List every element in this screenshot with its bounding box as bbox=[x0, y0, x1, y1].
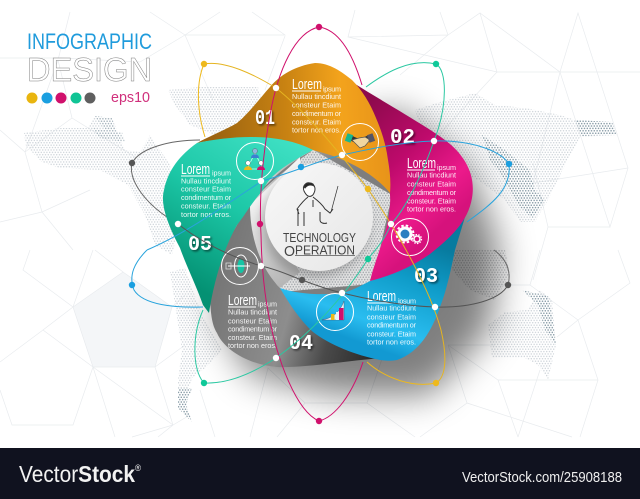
panel: orange petal 01 bbox=[197, 63, 390, 193]
label: eps10: eps10 bbox=[111, 89, 150, 106]
panel: green petal 05 bbox=[163, 137, 313, 313]
heading: Lorem bbox=[407, 156, 436, 172]
text block: 03 bbox=[367, 289, 417, 346]
text block: 01: ipsum bbox=[323, 84, 341, 94]
text block: 05: tortor non eros. bbox=[181, 210, 231, 219]
icon: gears bbox=[392, 218, 428, 256]
text block: 04: consteur Etaim bbox=[228, 316, 277, 326]
center title line 2: PERATION bbox=[295, 244, 355, 258]
center disc shadow bbox=[261, 170, 369, 278]
map: north america bbox=[24, 116, 178, 255]
footer logo: VectorStock bbox=[19, 461, 141, 487]
text block: 03: consteur Etaim bbox=[367, 312, 416, 322]
text block: 01: condimentum or bbox=[292, 109, 342, 118]
number 05: 05 bbox=[188, 234, 212, 257]
text block: 01: consteur. Etaim bbox=[292, 118, 341, 126]
text block: 04: ipsum bbox=[258, 300, 277, 308]
map: greenland bbox=[168, 87, 262, 135]
panel: grey petal 04 bbox=[210, 150, 385, 367]
map: south america bbox=[170, 268, 222, 422]
dotted world map bbox=[24, 87, 618, 422]
map: australia bbox=[488, 290, 556, 380]
back orbit segments bbox=[131, 27, 509, 421]
text block: 03: tortor non eros. bbox=[367, 338, 416, 346]
text block: 05 bbox=[181, 162, 232, 219]
text block: 01: consteur Etaim bbox=[292, 100, 341, 110]
text block: 01 bbox=[292, 77, 342, 134]
text block: 03: ipsum bbox=[398, 296, 416, 306]
orbit: green bbox=[204, 64, 444, 383]
orbit: blue back bbox=[132, 164, 509, 307]
footer bar bbox=[0, 448, 640, 499]
text block: 02: ipsum bbox=[437, 163, 456, 172]
icon: presenter with pointer bbox=[297, 183, 338, 226]
text block: 04: Nullau tincdiunt bbox=[228, 308, 277, 316]
front orbit lines bbox=[147, 27, 509, 421]
text block: 05: consteur. Etaim bbox=[181, 202, 231, 210]
text block: 05: consteur Etaim bbox=[181, 184, 231, 194]
text block: 03: Nullau tincdiunt bbox=[367, 304, 416, 312]
colour dots bbox=[26, 92, 96, 104]
orbit dots bbox=[129, 24, 512, 424]
text block: 02: consteur Etaim bbox=[407, 180, 456, 188]
orbit: magenta bbox=[260, 27, 319, 421]
map: australia edge bbox=[522, 290, 556, 345]
text block: 01: tortor non eros. bbox=[292, 126, 341, 134]
number 04: 04 bbox=[289, 333, 313, 356]
text block: 02: Nullau tincdiunt bbox=[407, 170, 456, 180]
orbit: grey back bbox=[131, 140, 509, 285]
text block: 05: ipsum bbox=[212, 168, 231, 178]
icon: people network bbox=[236, 142, 274, 180]
icon: bar chart bbox=[316, 294, 354, 330]
heading: infographic: INFOGRAPHIC bbox=[27, 29, 152, 54]
map: north america edge bbox=[92, 116, 125, 142]
orbit: blue bbox=[147, 141, 509, 250]
map: eurasia dark bbox=[482, 120, 616, 218]
panel: blue petal 03 bbox=[280, 217, 465, 361]
number 03: 03 bbox=[414, 266, 438, 289]
center disc bbox=[265, 163, 373, 271]
heading: Lorem bbox=[181, 162, 210, 178]
text block: 04 bbox=[228, 293, 278, 350]
orbit: green back bbox=[195, 63, 436, 383]
number 01: 01 bbox=[255, 108, 275, 131]
icon: target with arrow bbox=[222, 248, 258, 284]
grey petal light fold bbox=[250, 157, 300, 288]
orbit: yellow bbox=[204, 63, 445, 383]
center title line 2: O bbox=[284, 243, 295, 260]
heading: Lorem bbox=[367, 289, 396, 305]
text block: 04: tortor non eros. bbox=[228, 341, 277, 350]
map: eurasia bbox=[415, 93, 618, 222]
text block: 02: tortor non eros. bbox=[407, 204, 456, 214]
footer logo: ® bbox=[135, 463, 141, 473]
map: south america edge bbox=[178, 388, 192, 422]
heading: Lorem bbox=[292, 77, 322, 93]
text block: 04: consteur. Etaim bbox=[228, 333, 277, 342]
map: africa bbox=[452, 250, 510, 300]
center title line 2 bbox=[284, 243, 355, 260]
text block: 03: consteur. Etaim bbox=[367, 330, 416, 338]
center title bbox=[283, 231, 357, 260]
orbit: magenta back bbox=[319, 27, 363, 421]
footer url: VectorStock.com/25908188 bbox=[462, 470, 622, 486]
number 02: 02 bbox=[390, 127, 415, 150]
orbit: yellow back bbox=[198, 64, 436, 384]
text block: 01: Nullau tincdiunt bbox=[292, 92, 341, 101]
text block: 05: Nullau tincdiunt bbox=[181, 176, 231, 186]
petal drop shadow bbox=[215, 110, 500, 395]
heading: Lorem bbox=[228, 293, 257, 309]
center title line 1: TECHNOLOGY bbox=[283, 231, 357, 245]
panel: magenta petal 02 bbox=[352, 82, 473, 281]
heading: design: DESIGN bbox=[27, 51, 152, 88]
text block: 02: consteur. Etaim bbox=[407, 196, 456, 206]
text block: 02 bbox=[407, 156, 457, 214]
text block: 02: condimentum or bbox=[407, 188, 457, 197]
orbit: grey bbox=[178, 224, 508, 307]
text block: 05: condimentum or bbox=[181, 193, 232, 202]
icon: handshake bbox=[342, 124, 378, 160]
inner dotted hub bbox=[244, 148, 392, 292]
text block: 04: condimentum or bbox=[228, 324, 278, 334]
text block: 03: condimentum or bbox=[367, 320, 417, 330]
